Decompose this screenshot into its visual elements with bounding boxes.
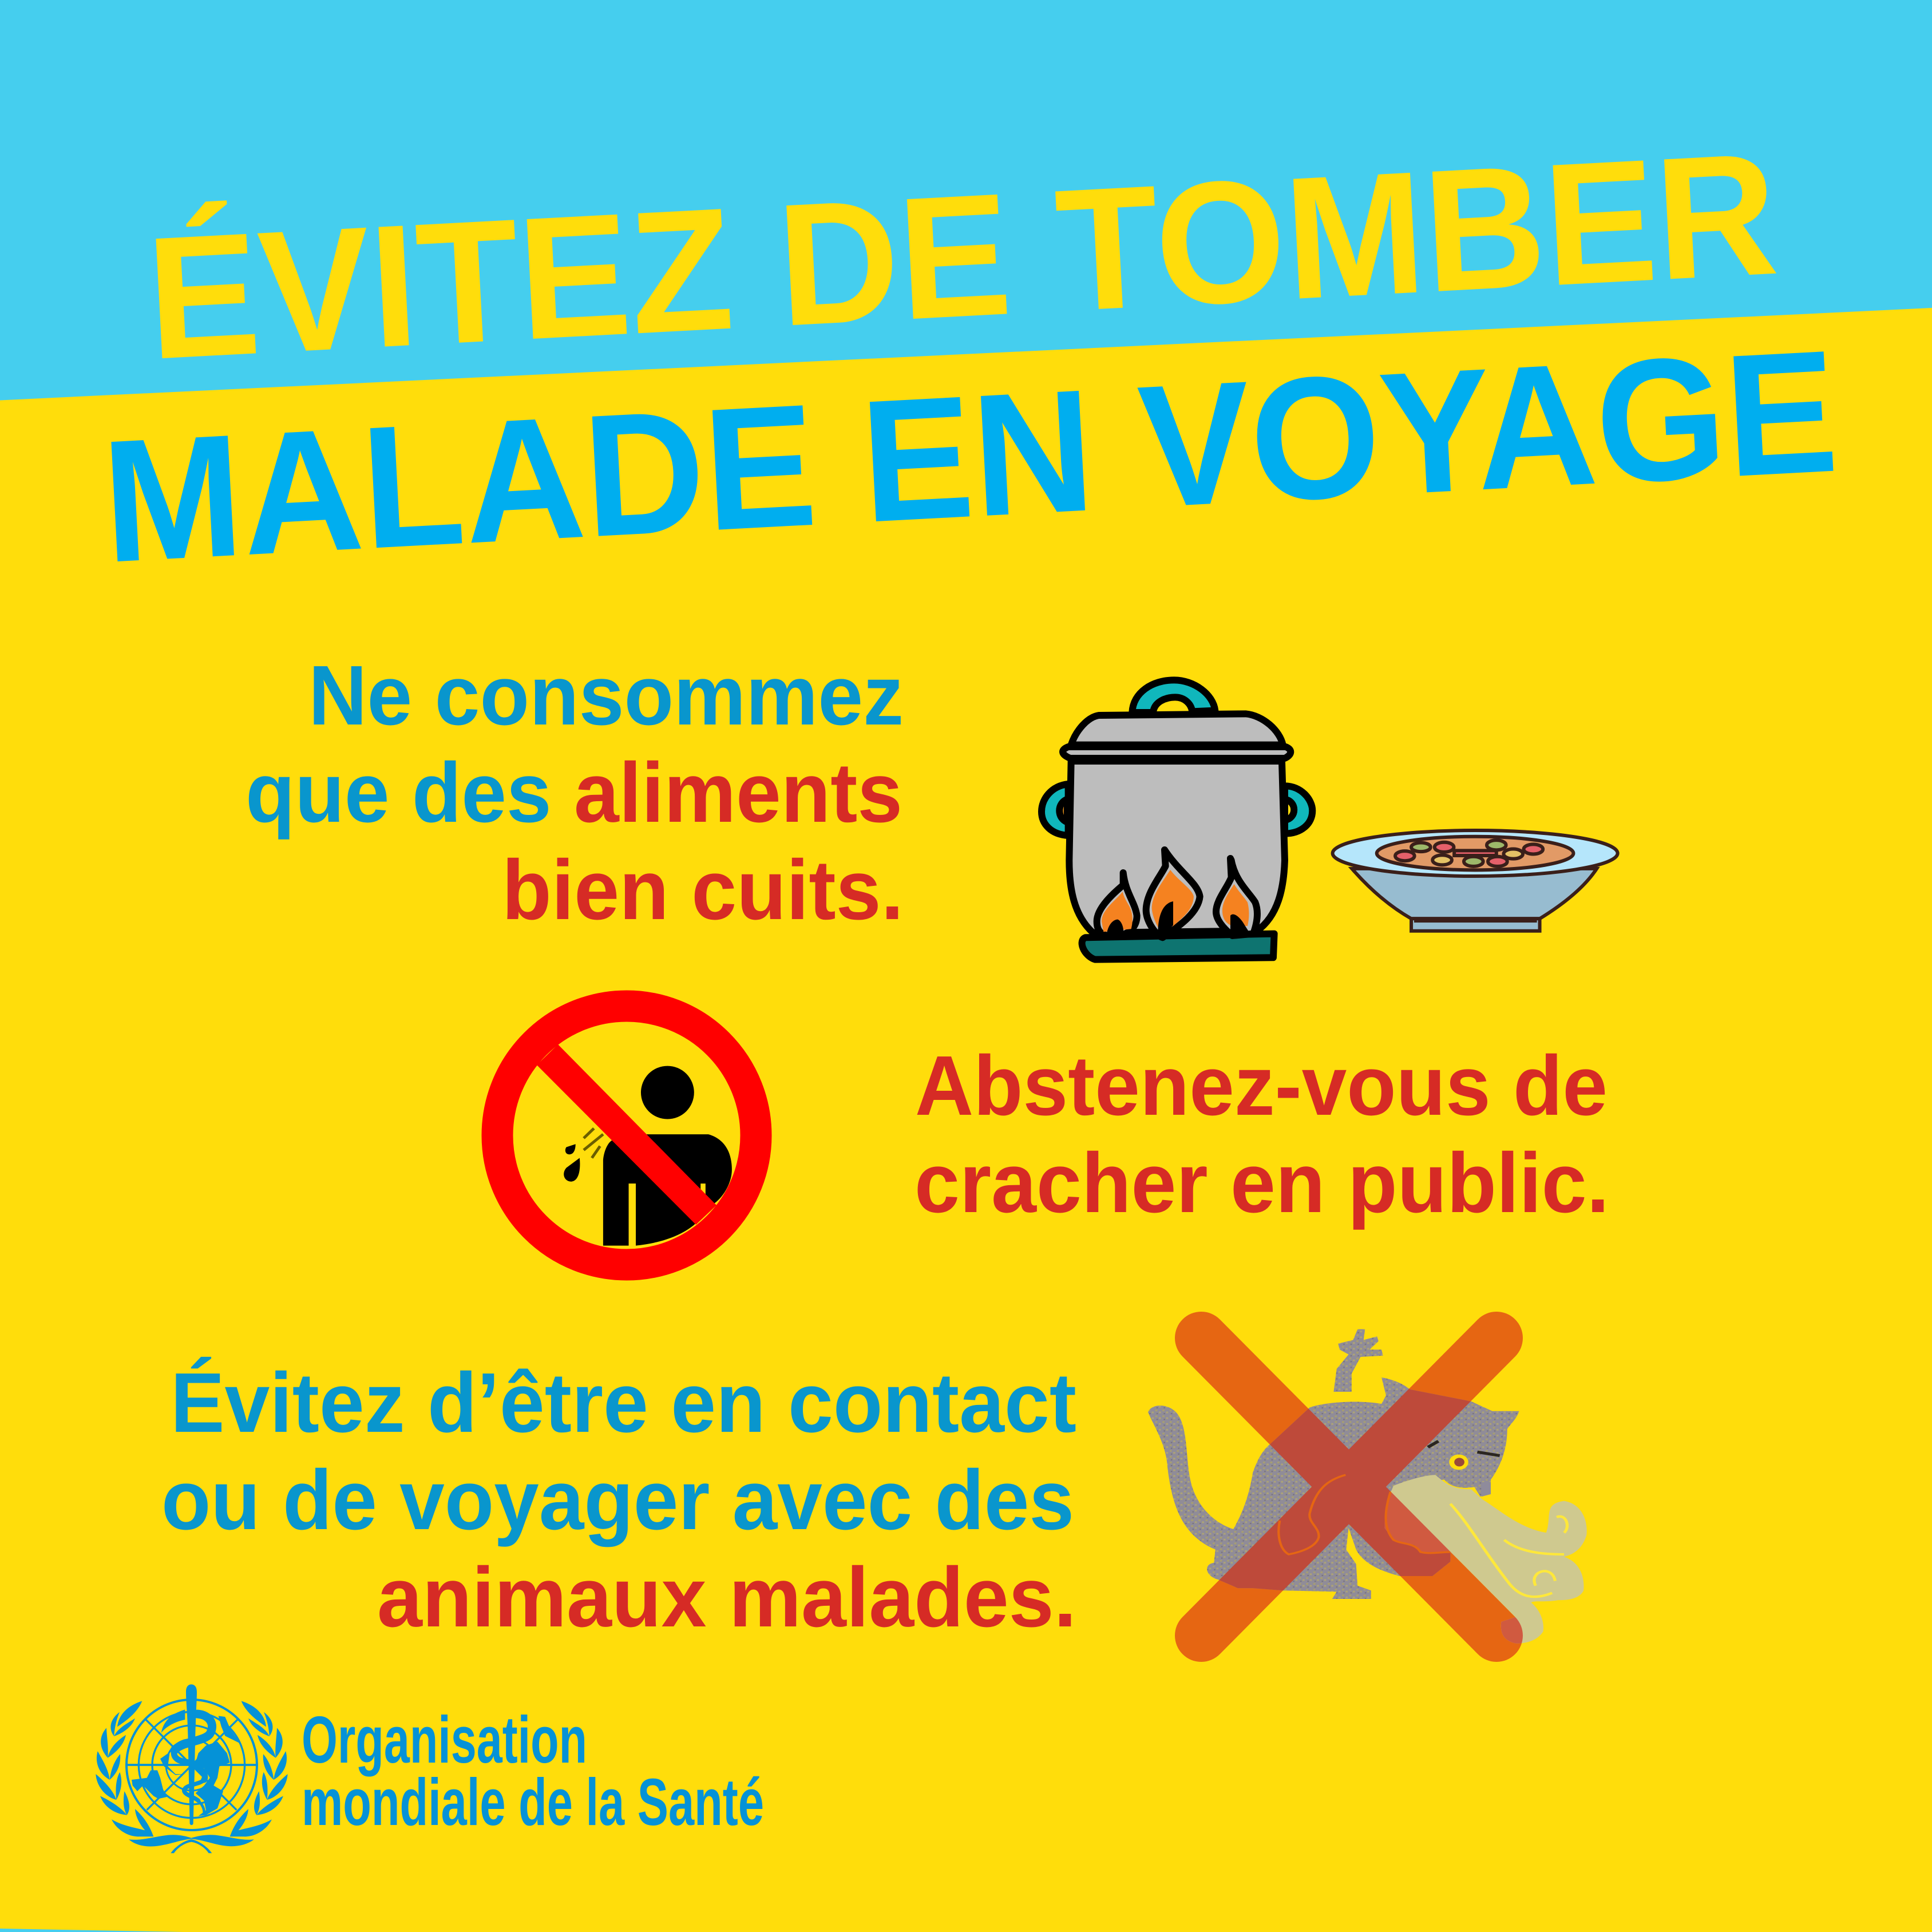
bowl rim [1333,830,1618,876]
bowl foot [1411,919,1540,931]
WHO wordmark: mondiale de la Santé [302,1765,764,1839]
text: sick animals: animaux malades. [377,1550,1076,1645]
red overlap of cross and cat [1219,1388,1523,1644]
left flame [1097,873,1137,937]
WHO wordmark: Organisation [302,1703,587,1777]
middle flame [1146,850,1200,937]
title line 1: ÉVITEZ DE TOMBER [143,117,1781,396]
laurel wreath left [96,1701,153,1836]
text: cooked food: que des aliments [246,746,902,840]
title line 2: MALADE EN VOYAGE [98,314,1842,599]
spit droplets [565,1144,576,1154]
vomiting cat [1148,1329,1587,1644]
icon: crossed-out sick cat [1148,1329,1587,1644]
orange cross [1201,1338,1496,1636]
text: cooked food [246,648,904,937]
soup vegetables [1395,840,1543,866]
burner base [1082,934,1274,960]
text: sick animals [161,1356,1076,1645]
laurel wreath right [230,1701,288,1836]
ribbon [129,1835,254,1846]
WHO wordmark [302,1703,764,1839]
icon: soup bowl [1333,830,1618,931]
blue header band [0,0,1932,401]
serpent head [161,1709,185,1733]
prohibition ring [497,1006,756,1265]
right flame [1216,858,1257,936]
text: sick animals: ou de voyager avec des [161,1453,1074,1547]
pot rim [1063,747,1290,758]
text: no spitting: cracher en public. [914,1136,1609,1230]
pot lid [1071,714,1283,745]
text: cooked food: bien cuits. [502,843,904,937]
ribbon tails [171,1839,212,1853]
text: no spitting: Abstenez-vous de [915,1039,1608,1133]
text: cooked food: Ne consommez [308,648,904,743]
icon: no spitting sign [497,1006,756,1265]
bowl body [1352,869,1597,919]
staff [186,1684,197,1825]
icon: pot on flames [1042,680,1312,960]
prohibition bar [537,1044,716,1225]
pot top handle [1132,680,1215,712]
text: no spitting [914,1039,1609,1230]
spitting person [564,1066,732,1246]
continents [132,1770,167,1799]
serpent [174,1714,212,1812]
pot side handles [1042,784,1312,836]
bowl foot stripe [1414,919,1537,923]
globe grid [126,1700,257,1830]
WHO emblem [96,1684,288,1853]
bottom edge accent [0,1929,183,1932]
text: sick animals: Évitez d’être en contact [171,1356,1076,1450]
pot body [1069,761,1285,933]
soup [1377,837,1573,870]
